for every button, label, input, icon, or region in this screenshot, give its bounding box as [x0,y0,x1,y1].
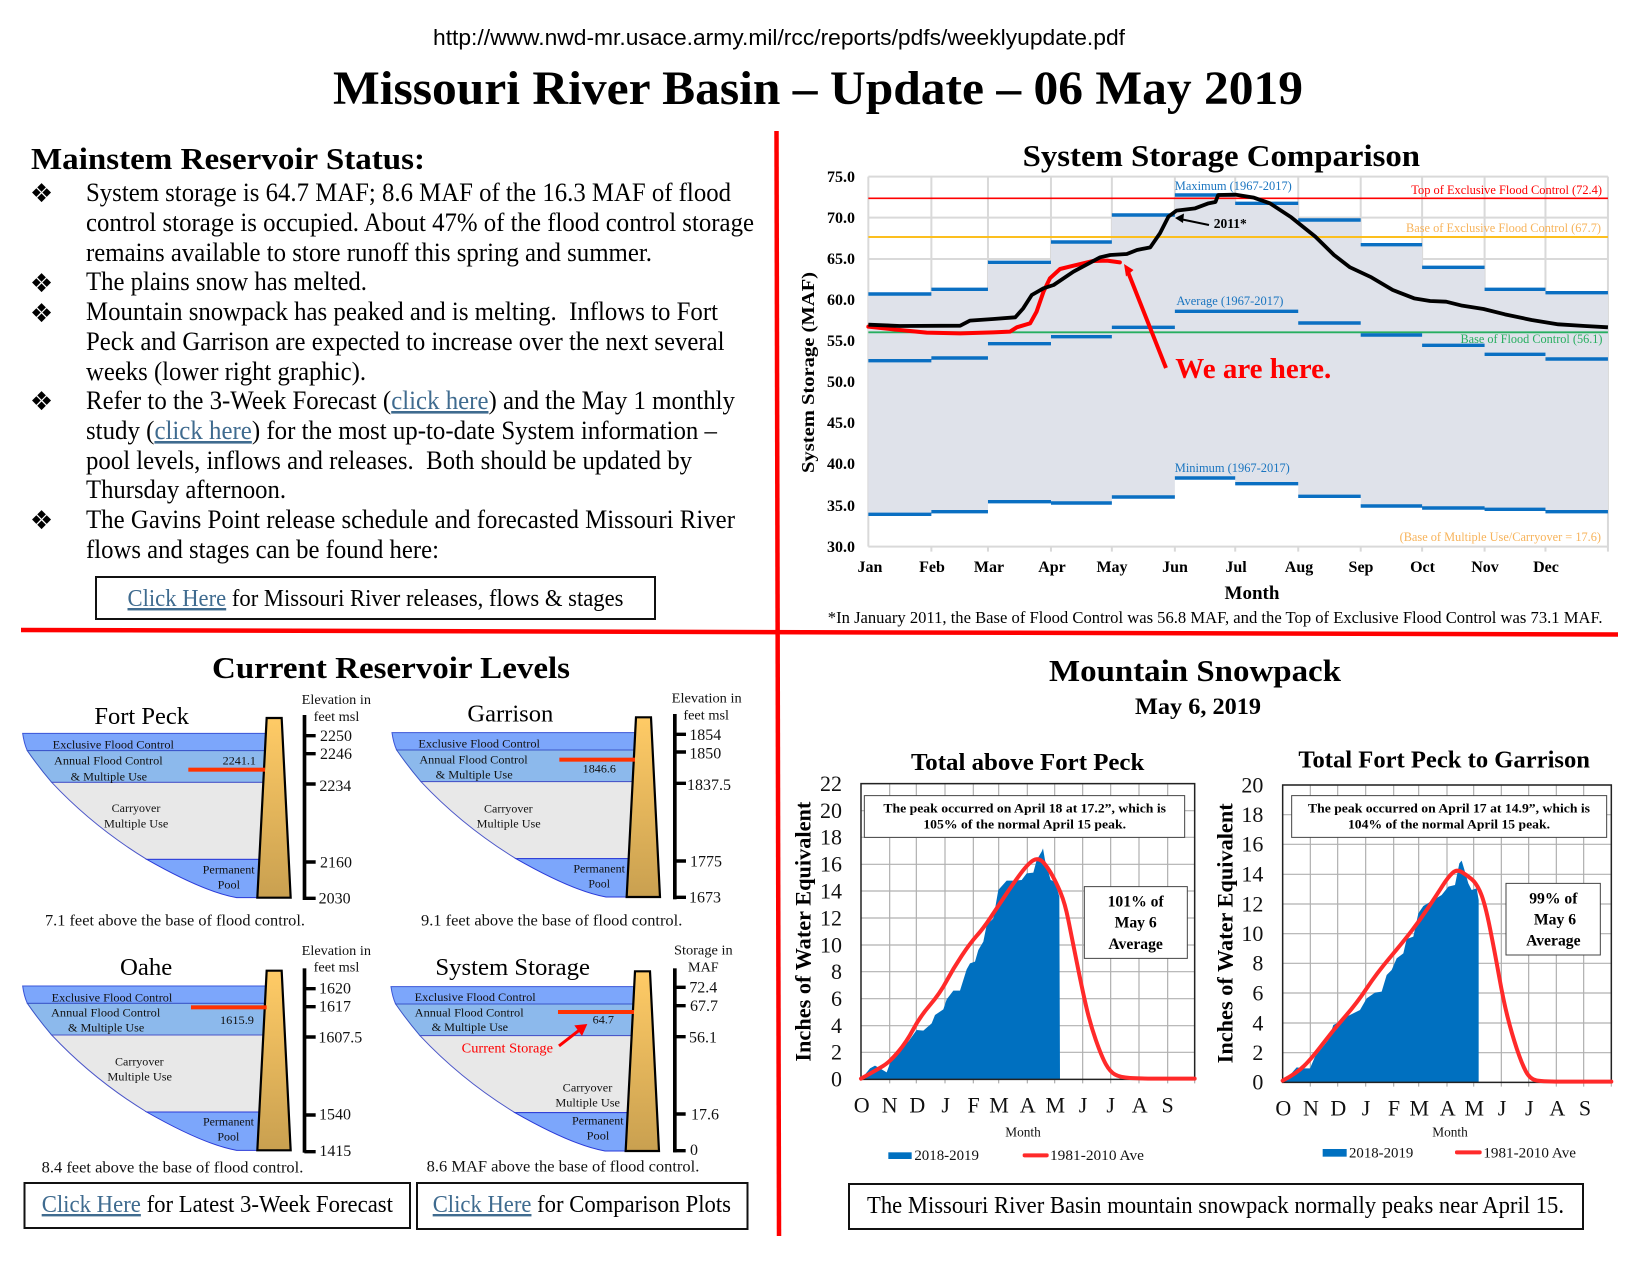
x axis labels: Apr [1038,559,1066,576]
chart: total fort peck to garrison: 8 [1252,951,1263,976]
chart: total fort peck to garrison: O [1275,1096,1291,1121]
diagram: fort peck: Multiple Use [104,816,168,830]
diagram: fort peck: Annual Flood Control [54,754,163,768]
x axis labels: Nov [1471,559,1499,576]
chart: total fort peck to garrison [1213,747,1611,1161]
bullet icons: ❖ [30,269,53,299]
bullet list text: Mountain snowpack has peaked and is melting. Inflows to Fort [86,297,719,326]
x axis labels: Mar [974,559,1004,576]
diagram: oahe: 1607.5 [318,1029,362,1046]
chart: total fort peck to garrison: A [1549,1096,1565,1121]
diagram: fort peck: Carryover [112,801,160,815]
chart: total above fort peck: 8 [831,959,842,984]
x axis labels: Jul [1225,559,1247,576]
chart: total fort peck to garrison: J [1498,1096,1507,1121]
bullet list text [86,178,754,564]
bullet list text: flows and stages can be found here: [86,535,439,564]
diagram: oahe: Permanent [203,1115,255,1129]
chart: total above fort peck: 101% of [1108,894,1164,911]
button: missouri river releases link [96,577,655,619]
bullet icons [30,179,53,536]
diagram: garrison: Garrison [467,701,553,728]
diagram: oahe: feet msl [314,960,360,975]
diagram: fort peck: 2250 [320,728,352,745]
x axis labels: Oct [1410,559,1436,576]
y axis title: System Storage (MAF) [798,272,819,473]
chart: total fort peck to garrison: 14 [1241,862,1263,887]
x axis labels: May [1096,559,1128,576]
chart: total above fort peck: 2 [831,1040,842,1065]
diagram: fort peck [23,692,371,929]
bullet list text: remains available to store runoff this spring and summer. [86,238,652,267]
diagram: garrison: 1846.6 [583,761,616,775]
callout: snowpack peak note: The Missouri River Basin mountain snowpack normally peaks near April 15. [867,1193,1564,1219]
source url: http://www.nwd-mr.usace.army.mil/rcc/reports/pdfs/weeklyupdate.pdf [433,25,1126,50]
y axis labels: 40.0 [827,456,855,473]
y axis labels: 35.0 [827,498,855,515]
title: Missouri River Basin – Update – 06 May 2019 [333,62,1303,115]
chart: total above fort peck: The peak occurred on April 18 at 17.2”, which is [883,801,1166,815]
diagram: oahe: 8.4 feet above the base of flood control. [42,1160,303,1177]
diagram: garrison: 1850 [689,745,721,762]
chart: total fort peck to garrison: May 6 [1534,911,1576,928]
chart: total fort peck to garrison: N [1303,1096,1319,1121]
bullet list text: Thursday afternoon. [86,475,286,504]
series labels: Average (1967-2017) [1176,294,1283,308]
series labels: Base of Exclusive Flood Control (67.7) [1406,221,1601,235]
diagram: oahe: 1617 [319,999,351,1016]
chart: total above fort peck: Total above Fort Peck [911,750,1145,776]
heading: mainstem reservoir status: Mainstem Reservoir Status: [31,141,425,176]
series labels: Base of Flood Control (56.1) [1460,332,1602,346]
diagram: oahe: Elevation in [302,943,371,958]
diagram: garrison: 1837.5 [687,777,731,794]
diagram: oahe: Exclusive Flood Control [52,990,173,1004]
panel: system storage comparison [798,138,1608,627]
x axis labels: Jan [858,559,883,576]
chart: total fort peck to garrison: 18 [1241,802,1263,827]
x axis labels: Feb [919,559,945,576]
button: missouri river releases link: Click Here for Missouri River releases, flows & stages [128,585,624,612]
chart: total above fort peck: 18 [820,825,842,850]
chart: total fort peck to garrison: 4 [1252,1010,1263,1035]
y axis labels: 70.0 [827,210,855,227]
chart: total above fort peck: 14 [820,878,842,903]
diagram: system storage: Multiple Use [555,1096,620,1110]
chart: total fort peck to garrison: 16 [1241,832,1263,857]
chart: total fort peck to garrison: 20 [1241,772,1263,797]
button: 3-week forecast link: Click Here for Latest 3-Week Forecast [42,1192,393,1218]
chart: total above fort peck: 1981-2010 Ave [1050,1148,1144,1164]
chart: total above fort peck: 20 [820,798,842,823]
bullet list text: Refer to the 3-Week Forecast (click here) and the May 1 monthly [86,386,735,415]
diagram: fort peck: 7.1 feet above the base of flood control. [45,912,305,929]
diagram: oahe: 1620 [319,980,351,997]
chart: total above fort peck: 16 [820,852,842,877]
diagram: oahe: Oahe [120,954,172,981]
y axis labels: 50.0 [827,374,855,391]
chart: total fort peck to garrison: 2018-2019 [1349,1145,1413,1161]
x axis labels [858,559,1559,576]
diagram: system storage: 8.6 MAF above the base of flood control. [427,1159,699,1176]
diagram: oahe: & Multiple Use [68,1021,144,1035]
x axis labels: Dec [1533,559,1559,576]
chart: total above fort peck: 22 [820,771,842,796]
diagram: oahe: 1615.9 [220,1013,254,1027]
y axis labels: 60.0 [827,292,855,309]
annotation: 2011 [1175,214,1247,231]
bullet list text: study (click here) for the most up-to-date System information – [86,416,718,445]
panel: current reservoir levels [23,650,747,1229]
diagram: fort peck: Permanent [203,863,255,877]
x axis title: Month [1225,583,1280,604]
diagram: oahe: Carryover [115,1055,164,1069]
chart: total fort peck to garrison: A [1440,1096,1456,1121]
diagram: system storage: Carryover [563,1080,612,1094]
series labels: Minimum (1967-2017) [1175,461,1290,475]
chart: total fort peck to garrison: 6 [1252,980,1263,1005]
y axis labels: 75.0 [827,169,855,186]
diagram: oahe [23,943,371,1177]
diagram: system storage: System Storage [435,954,590,981]
diagram: system storage: 72.4 [689,980,717,997]
chart: total above fort peck: F [968,1092,980,1117]
chart: total fort peck to garrison: F [1388,1096,1400,1121]
callout: we are here: We are here. [1175,354,1331,385]
bullet list text: The Gavins Point release schedule and forecasted Missouri River [86,505,735,534]
diagram: garrison: & Multiple Use [436,767,513,781]
callout: snowpack peak note [849,1184,1583,1229]
panel: mainstem reservoir status [30,141,754,619]
divider: horizontal red line [21,630,1618,634]
divider: vertical red line [776,131,779,1236]
diagram: oahe: Pool [217,1130,240,1144]
diagram: system storage: 0 [690,1142,698,1159]
bullet icons: ❖ [30,506,53,536]
button: comparison plots link: Click Here for Comparison Plots [433,1192,731,1218]
diagram: fort peck: & Multiple Use [71,769,147,783]
bullet list text: control storage is occupied. About 47% of the flood control storage [86,208,754,237]
chart: total above fort peck: Inches of Water Equivalent [791,801,816,1062]
diagram: system storage: 56.1 [689,1029,717,1046]
heading: system storage comparison: System Storage Comparison [1023,138,1420,173]
chart: total above fort peck: 0 [831,1067,842,1092]
diagram: fort peck: 2030 [319,890,351,907]
diagram: fort peck: 2241.1 [223,754,256,768]
diagram: fort peck: 2246 [320,746,352,763]
diagram: system storage: Current Storage [462,1040,553,1055]
diagram: fort peck: 2160 [320,854,352,871]
diagram: garrison: Permanent [573,862,626,876]
diagram: fort peck: Fort Peck [94,703,190,730]
diagram: fort peck: 2234 [319,778,351,795]
chart: total above fort peck: 12 [820,905,842,930]
chart: total above fort peck: J [1106,1092,1115,1117]
diagram: oahe: Annual Flood Control [51,1006,161,1020]
chart: total fort peck to garrison: 1981-2010 Ave [1483,1145,1576,1161]
chart: total above fort peck: 6 [831,986,842,1011]
diagram: system storage: 64.7 [593,1013,614,1027]
chart: total above fort peck: O [854,1092,870,1117]
chart: total fort peck to garrison: J [1362,1096,1371,1121]
chart: total above fort peck: May 6 [1115,915,1157,932]
chart: total fort peck to garrison: 12 [1241,891,1263,916]
chart: total fort peck to garrison: M [1465,1096,1484,1121]
chart: total above fort peck: 4 [831,1013,842,1038]
chart: total above fort peck: J [1079,1092,1088,1117]
diagram: fort peck: feet msl [314,709,360,724]
x axis labels: Aug [1285,559,1313,576]
button: comparison plots link [417,1183,748,1229]
series labels: Top of Exclusive Flood Control (72.4) [1411,183,1602,197]
chart: total above fort peck: N [882,1092,898,1117]
chart: total above fort peck: 105% of the normal April 15 peak. [923,817,1126,831]
x axis labels: Jun [1162,559,1188,576]
chart: total above fort peck: Average [1108,936,1163,953]
chart: total fort peck to garrison: 104% of the normal April 15 peak. [1348,818,1550,832]
diagram: fort peck: Pool [218,877,241,891]
chart: total fort peck to garrison: 10 [1241,921,1263,946]
chart: total above fort peck: J [941,1092,950,1117]
chart: total above fort peck: D [909,1092,925,1117]
diagram: fort peck: Exclusive Flood Control [53,737,175,751]
series labels [1175,179,1602,544]
diagram: system storage: Storage in [674,942,733,957]
subheading: date: May 6, 2019 [1135,694,1261,720]
diagram: garrison: 9.1 feet above the base of flood control. [421,913,682,930]
diagram: system storage: Pool [587,1128,610,1142]
diagram: garrison: Multiple Use [477,816,541,830]
y axis labels [827,169,855,556]
bullet list text: pool levels, inflows and releases. Both should be updated by [86,446,692,475]
diagram: system storage: Permanent [572,1114,624,1128]
diagram: system storage: 67.7 [690,998,718,1015]
diagram: system storage: & Multiple Use [432,1020,508,1034]
diagram: oahe: Multiple Use [107,1070,172,1084]
bullet icons: ❖ [30,387,53,417]
diagram: system storage: Annual Flood Control [415,1006,524,1020]
arrow: we are here [1124,264,1166,368]
chart: total fort peck to garrison: 99% of [1529,890,1578,907]
chart: total fort peck to garrison: Inches of Water Equivalent [1213,803,1238,1063]
chart: total fort peck to garrison: D [1330,1096,1346,1121]
chart: total fort peck to garrison: Month [1432,1125,1468,1140]
footnote: *In January 2011, the Base of Flood Control was 56.8 MAF, and the Top of Exclusive Flood Control was 73.1 MAF. [828,608,1602,627]
chart: total above fort peck [791,750,1195,1164]
chart: total fort peck to garrison: S [1579,1096,1591,1121]
bullet icons: ❖ [30,179,53,209]
chart: total fort peck to garrison: 2 [1252,1040,1263,1065]
bullet list text: weeks (lower right graphic). [86,357,366,386]
y axis labels: 45.0 [827,415,855,432]
chart: total above fort peck: 10 [820,932,842,957]
bullet icons: ❖ [30,299,53,329]
line chart: system storage [868,177,1608,552]
chart: total fort peck to garrison: The peak occurred on April 17 at 14.9”, which is [1308,802,1590,816]
diagram: garrison: Pool [588,876,611,890]
chart: total fort peck to garrison: J [1525,1096,1534,1121]
chart: total fort peck to garrison: M [1410,1096,1429,1121]
diagram: garrison: Exclusive Flood Control [418,736,541,750]
chart: total above fort peck: M [989,1092,1009,1117]
diagram: system storage: MAF [688,960,719,975]
diagram: garrison: 1854 [689,727,721,744]
chart: total above fort peck: A [1020,1092,1036,1117]
heading: mountain snowpack: Mountain Snowpack [1049,653,1342,688]
chart: total above fort peck: S [1162,1092,1174,1117]
series labels: Maximum (1967-2017) [1175,179,1292,193]
diagram: fort peck: Elevation in [302,692,371,707]
diagram: garrison: Annual Flood Control [419,752,528,766]
chart: total above fort peck: Month [1005,1125,1041,1140]
diagram: garrison: Carryover [484,802,533,816]
diagram: system storage: 17.6 [691,1106,719,1123]
annotation: 2011: 2011* [1214,216,1247,231]
panel: mountain snowpack [791,653,1611,1229]
chart: total fort peck to garrison: Average [1526,933,1581,950]
y axis labels: 55.0 [827,333,855,350]
diagram: system storage [391,942,733,1176]
bullet list text: System storage is 64.7 MAF; 8.6 MAF of the 16.3 MAF of flood [86,178,731,207]
diagram: oahe: 1540 [319,1106,351,1123]
diagram: garrison: feet msl [683,708,729,723]
bullet list text: The plains snow has melted. [86,267,367,296]
diagram: system storage: Exclusive Flood Control [415,990,536,1004]
chart: total above fort peck: M [1046,1092,1065,1117]
diagram: garrison: Elevation in [672,691,742,706]
y axis labels: 30.0 [827,539,855,556]
diagram: oahe: 1415 [319,1143,351,1160]
chart: total above fort peck: A [1132,1092,1148,1117]
bullet list text: Peck and Garrison are expected to increase over the next several [86,327,724,356]
diagram: garrison: 1775 [690,854,722,871]
x axis labels: Sep [1349,559,1374,576]
diagram: garrison: 1673 [689,890,721,907]
chart: total fort peck to garrison: 0 [1252,1070,1263,1095]
y axis labels: 65.0 [827,251,855,268]
chart: total fort peck to garrison: Total Fort Peck to Garrison [1298,747,1590,773]
button: 3-week forecast link [24,1183,410,1228]
chart: total above fort peck: 2018-2019 [914,1148,979,1164]
series labels: (Base of Multiple Use/Carryover = 17.6) [1400,530,1601,544]
heading: current reservoir levels: Current Reservoir Levels [212,650,570,685]
diagram: garrison [392,691,742,930]
